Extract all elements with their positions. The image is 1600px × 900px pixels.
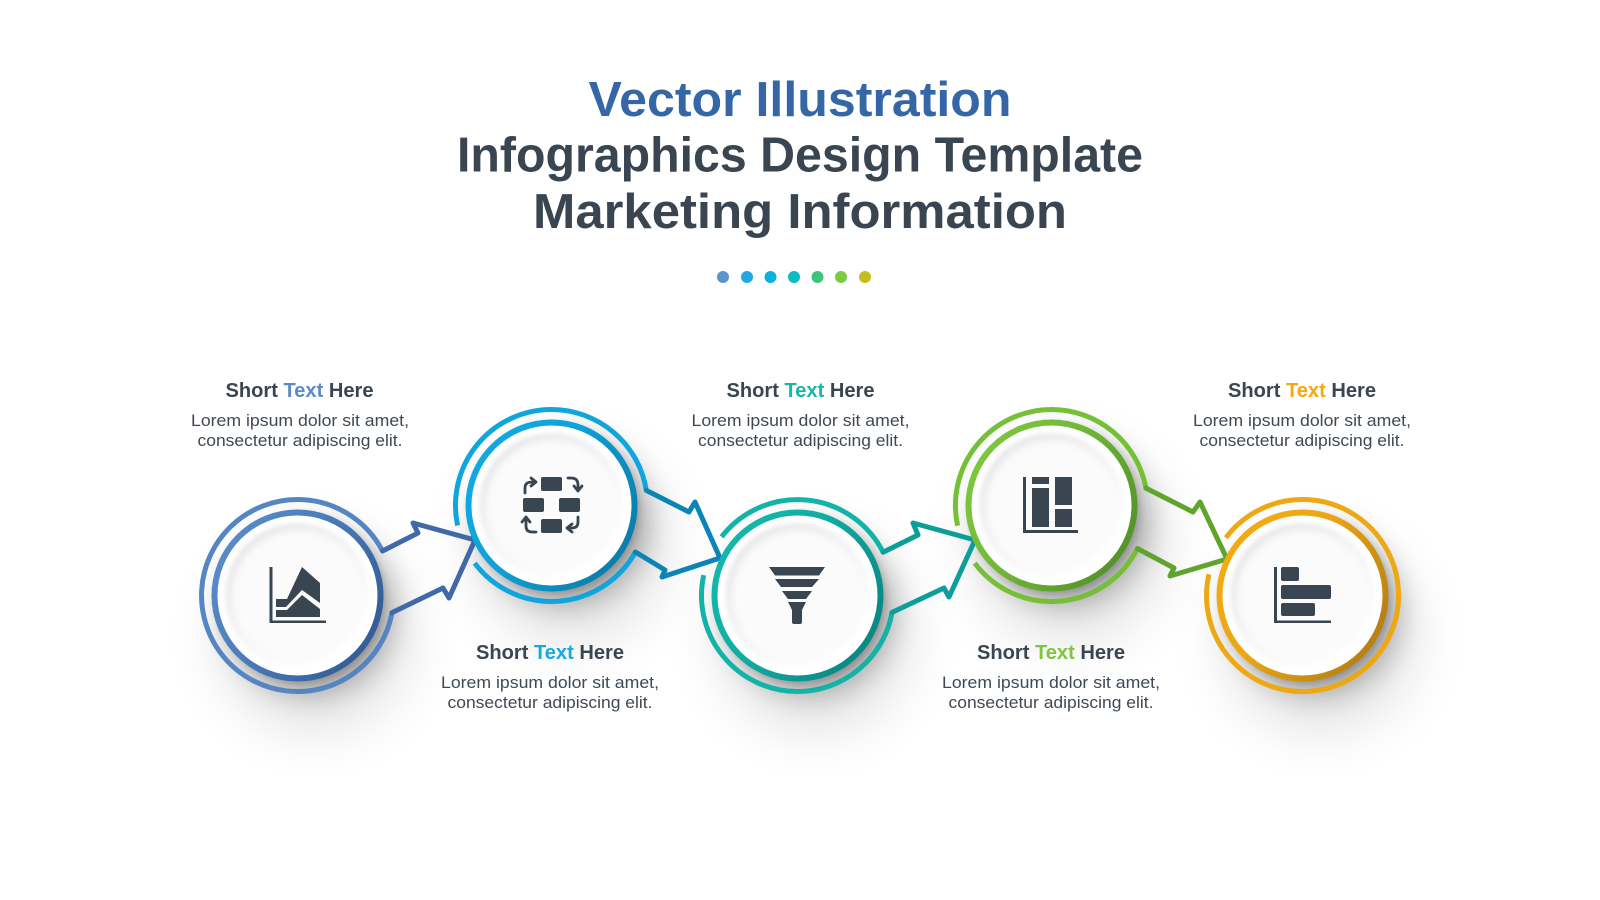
text block 1: Lorem ipsum dolor sit amet, [191,412,409,430]
text block 2 [441,641,659,712]
text block 5: Short Text Here [1228,379,1376,402]
arrow 1 [382,523,475,613]
text block 1 [191,379,409,450]
text block 1: consectetur adipiscing elit. [198,432,402,450]
text block 5: consectetur adipiscing elit. [1200,432,1404,450]
text block 2: Lorem ipsum dolor sit amet, [441,674,659,692]
text block 2: Short Text Here [476,641,624,664]
step 5: circle with horizontal bar icon [1207,500,1399,692]
arrow 4 [1137,488,1227,576]
title [457,73,1143,239]
text block 2: consectetur adipiscing elit. [448,694,652,712]
arrow 3 [883,523,975,612]
step 1: circle with area chart icon [202,500,475,692]
step 4: circle with stacked column icon [955,409,1227,602]
icon: funnel [769,567,825,624]
dot row [717,271,871,283]
text block 3 [692,379,910,450]
arrow 2 [635,490,720,577]
title: Vector Illustration [588,73,1012,127]
step 3: circle with funnel icon [702,500,975,692]
icon: stacked columns [1023,477,1078,533]
icon: process blocks [522,477,582,533]
text block 1: Short Text Here [226,379,374,402]
icon: horizontal bars [1274,567,1331,623]
icon: area chart [270,567,326,623]
title: Infographics Design Template [457,128,1143,182]
text block 5: Lorem ipsum dolor sit amet, [1193,412,1411,430]
text block 3: Short Text Here [726,379,874,402]
text block 4: Short Text Here [977,641,1125,664]
soft drop shadows [223,436,1412,727]
title: Marketing Information [533,185,1067,239]
text block 5 [1193,379,1411,450]
text block 4 [942,641,1160,712]
text block 4: consectetur adipiscing elit. [948,694,1154,712]
text block 3: consectetur adipiscing elit. [698,432,903,450]
text block 4: Lorem ipsum dolor sit amet, [942,674,1160,692]
text block 3: Lorem ipsum dolor sit amet, [692,412,910,430]
step 2: circle with process icon [455,410,720,601]
